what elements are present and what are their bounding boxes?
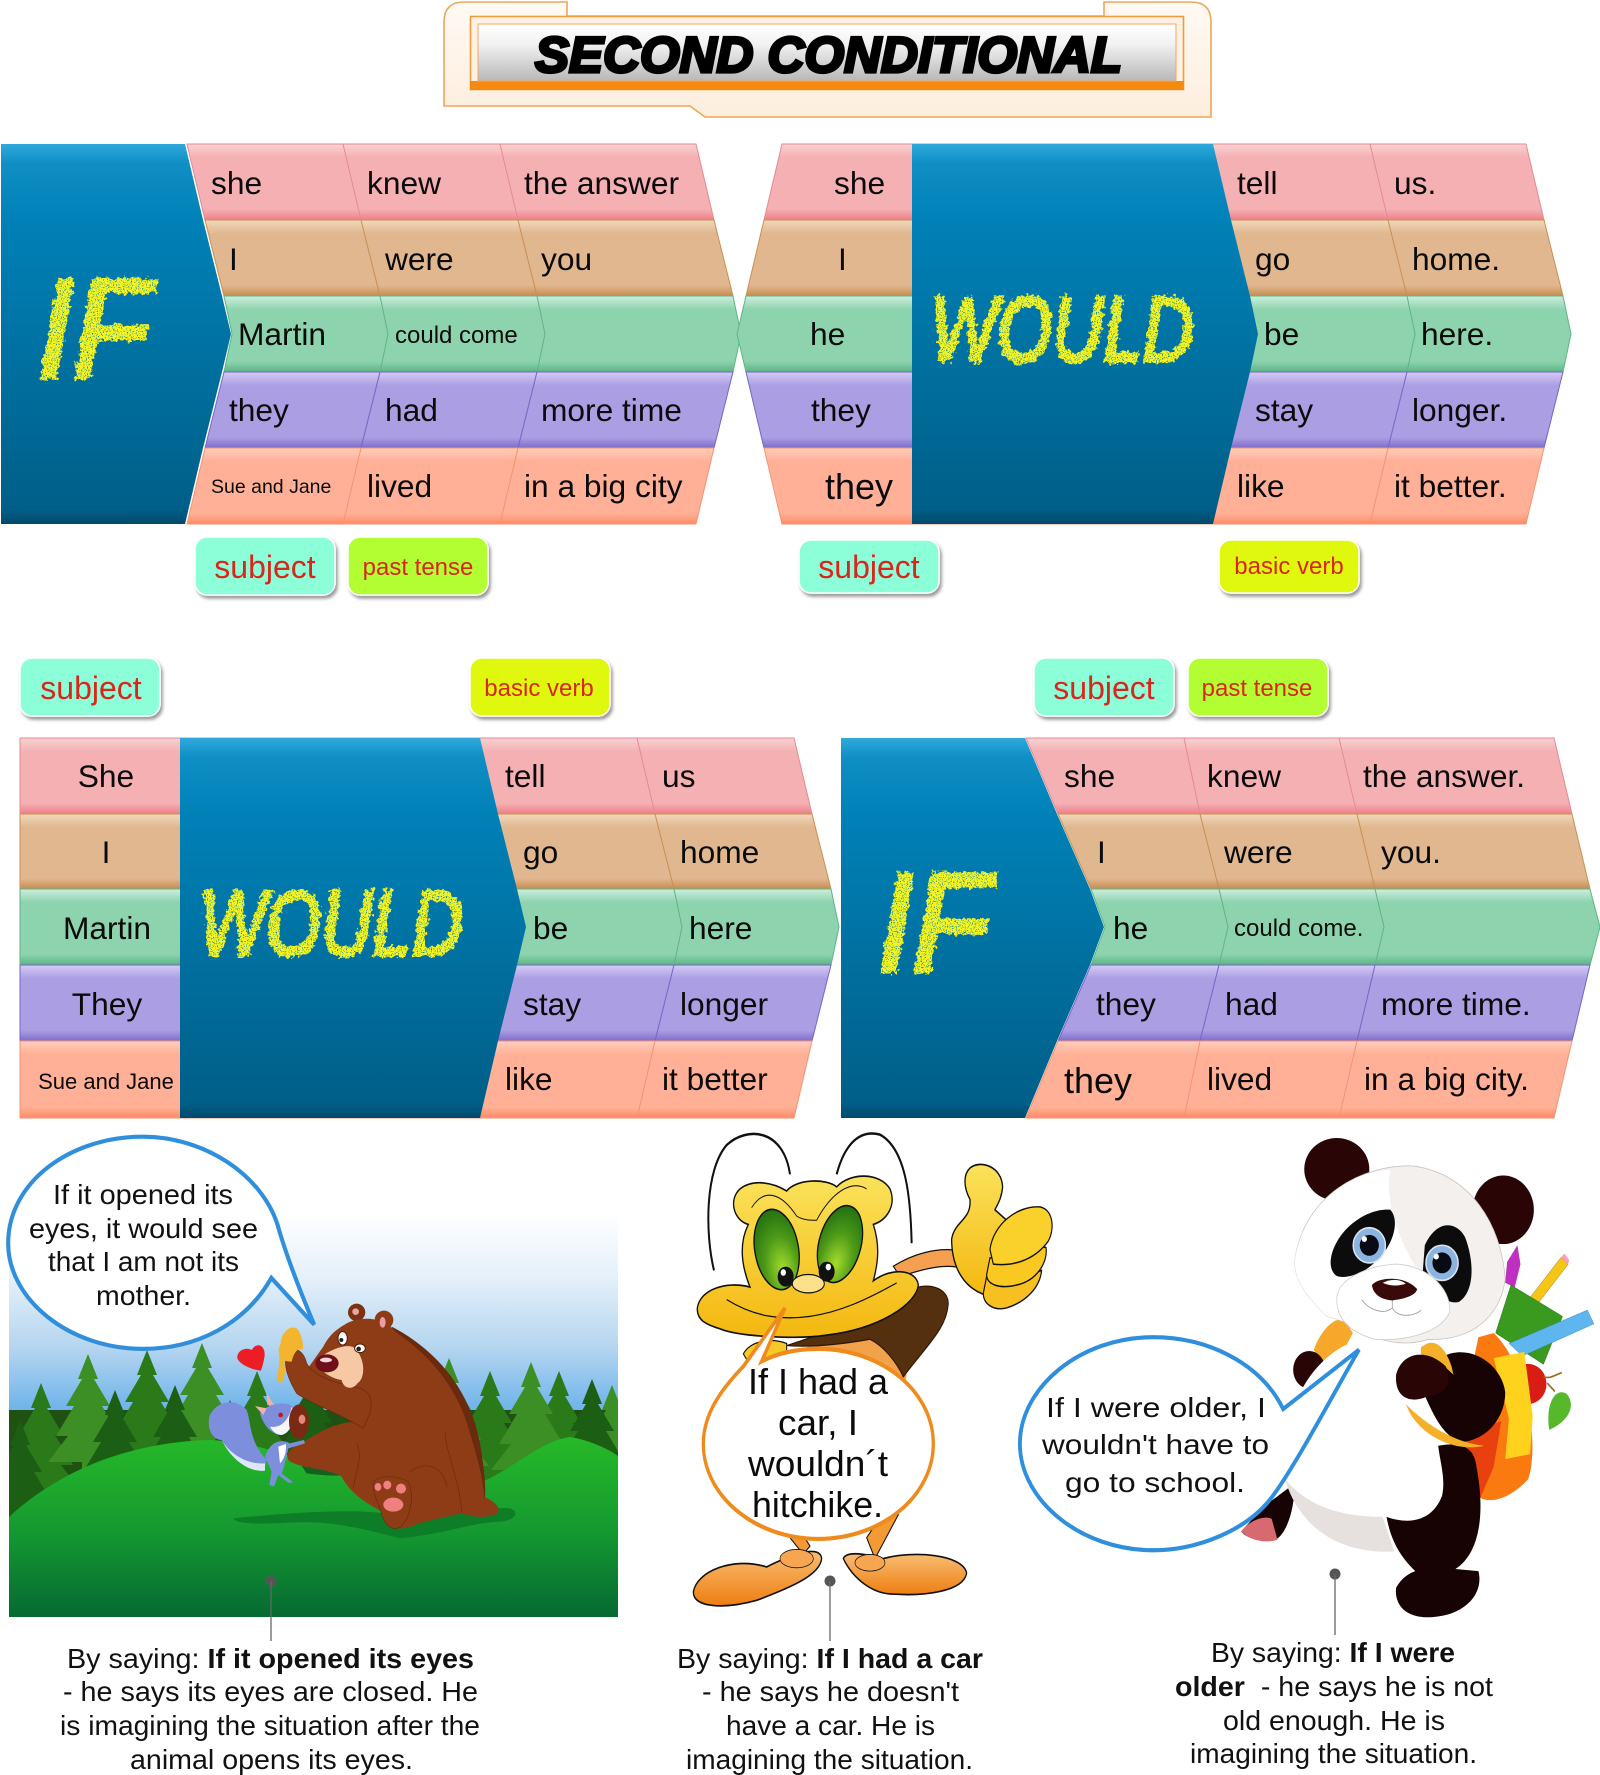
row: they like it better: it better. [1394,468,1507,504]
speech bubble: panda: If I were older, I [1046,1392,1266,1423]
caption: bear: By saying: If it opened its eyes [67,1643,474,1674]
row: She tell us [20,738,812,814]
row: he be here: he [810,316,845,352]
labels: subject and past tense, lower right: subject [1053,670,1155,706]
labels: subject and basic verb, top right: basic verb [1234,553,1344,580]
speech bubble: bear: eyes, it would see [29,1213,258,1244]
blue arrow: WOULD: WOULD [199,873,463,975]
speech bubble: panda: wouldn't have to [1041,1429,1269,1460]
row: he could come: could come. [1234,915,1363,942]
row: I go home: go [523,834,558,870]
row: I were you: I [229,241,238,277]
row: Martin be here: be [533,910,568,946]
row: Sue and Jane like it better: it better [662,1061,768,1097]
labels: subject and basic verb, lower left [20,658,610,716]
illustration: yellow bug [693,1133,1052,1606]
caption: bear: - he says its eyes are closed. He [63,1676,478,1707]
caption: bug: - he says he doesn't [702,1676,959,1707]
row: She tell us: tell [505,758,546,794]
row: they stay longer [746,372,1563,448]
illustration: bear and squirrel scene [0,1137,652,1617]
row: I were you: I [1097,834,1106,870]
row: Martin could come [224,296,741,372]
row: I go home [746,220,1563,296]
row: I go home: home. [1412,241,1500,277]
title banner [444,2,1211,117]
row: Sue and Jane like it better: Sue and Jane [38,1069,174,1094]
caption: bear: is imagining the situation after the [60,1710,480,1741]
row: she tell us: us. [1394,165,1436,201]
pin: panda caption pointer [1330,1568,1340,1635]
caption: bear [60,1643,480,1775]
row: she knew the answer: the answer [524,165,679,201]
row: they had more time: more time. [1381,986,1531,1022]
title banner: SECOND CONDITIONAL [535,27,1122,83]
row: they stay longer: they [811,392,871,428]
bear [233,1304,516,1538]
caption: panda: imagining the situation. [1190,1738,1477,1769]
blue arrow: WOULD [180,738,526,1118]
row: they had more time: had [385,392,438,428]
row: they stay longer: stay [1255,392,1313,428]
labels: subject and past tense, top left: subject [214,549,316,585]
row: they stay longer: longer. [1412,392,1507,428]
blue arrow: IF: IF [38,250,157,407]
row: They stay longer: longer [680,986,769,1022]
panel: WOULD clause, top right [737,144,1571,524]
blue arrow: WOULD: WOULD [930,279,1194,381]
row: I were you: you. [1381,834,1441,870]
caption: panda: old enough. He is [1223,1705,1445,1736]
squirrel [209,1393,309,1487]
labels: subject and basic verb, top right: subject [818,549,920,585]
caption: panda: older - he says he is not [1175,1671,1493,1702]
row: Martin could come: Martin [238,316,326,352]
row: she knew the answer: knew [367,165,441,201]
row: They stay longer: They [72,986,142,1022]
row: she tell us: tell [1237,165,1278,201]
row: I were you [205,220,733,296]
row: they lived in a big city: in a big city. [1364,1061,1529,1097]
pin: bear caption pointer [266,1576,276,1641]
row: he could come: he [1113,910,1148,946]
row: they lived in a big city [1026,1041,1572,1118]
row: she tell us: she [834,165,885,201]
blue arrow: IF [841,738,1104,1118]
row: he could come [1091,889,1600,965]
honey [278,1327,303,1383]
row: they had more time: had [1225,986,1278,1022]
row: he be here [737,296,1571,372]
labels: subject and past tense, lower right: past tense [1202,675,1312,702]
caption: bear: animal opens its eyes. [130,1744,413,1775]
row: Sue and Jane lived in a big city: lived [367,468,432,504]
row: she knew the answer: the answer. [1363,758,1525,794]
row: she knew the answer: she [211,165,262,201]
row: they like it better [764,448,1544,524]
speech bubble: bug: wouldn´t [747,1443,888,1484]
row: Sue and Jane lived in a big city [187,448,714,524]
speech bubble: bear: mother. [96,1280,191,1311]
labels: subject and basic verb, lower left: basic verb [484,675,594,702]
speech bubble: bear: that I am not its [48,1246,239,1277]
row: she knew the answer: she [1064,758,1115,794]
row: I were you: were [1223,834,1293,870]
row: I were you [1058,814,1590,889]
row: Martin be here [20,889,839,965]
row: I go home: home [680,834,759,870]
caption: bug [677,1643,983,1775]
speech bubble: bug [703,1308,933,1539]
row: Martin be here: here [689,910,752,946]
row: I go home: go [1255,241,1290,277]
row: he be here: be [1264,316,1299,352]
speech bubble: bug: If I had a [748,1361,889,1402]
row: she knew the answer [1026,738,1572,814]
row: she knew the answer [187,144,714,220]
row: Sue and Jane lived in a big city: Sue and Jane [211,476,331,498]
row: Martin be here: Martin [63,910,151,946]
panel: IF second, lower right [841,738,1600,1118]
row: Sue and Jane like it better: like [505,1061,553,1097]
row: they had more time: they [229,392,289,428]
row: I were you: you [541,241,592,277]
row: Sue and Jane like it better [20,1041,812,1118]
pin: bug caption pointer [824,1576,836,1641]
speech bubble: bug: car, I [778,1402,858,1443]
blue arrow: IF [1,144,231,524]
row: they like it better: they [825,466,893,507]
row: they had more time [1058,965,1590,1041]
row: They stay longer: stay [523,986,581,1022]
speech bubble: bug: hitchike. [752,1484,883,1525]
blue arrow: IF: IF [878,844,997,1001]
row: they had more time: they [1096,986,1156,1022]
panel: WOULD first, lower left [20,738,839,1118]
panel: IF clause, top left [1,144,741,524]
row: I go home [20,814,831,889]
heart [237,1345,265,1371]
caption: bug: have a car. He is [726,1710,935,1741]
row: they had more time [205,372,733,448]
row: they lived in a big city: they [1064,1060,1132,1101]
row: She tell us: us [662,758,695,794]
row: They stay longer [20,965,831,1041]
row: they like it better: like [1237,468,1285,504]
row: they lived in a big city: lived [1207,1061,1272,1097]
labels: subject and basic verb, lower left: subject [40,670,142,706]
row: she knew the answer: knew [1207,758,1281,794]
row: Martin could come: could come [395,322,518,349]
speech bubble: panda: go to school. [1065,1467,1245,1498]
caption: panda [1175,1637,1493,1769]
speech bubble: bear: If it opened its [53,1179,233,1210]
caption: bug: imagining the situation. [686,1744,973,1775]
illustration: panda with backpack [1241,1138,1594,1617]
blue arrow: WOULD [912,144,1258,524]
caption: bug: By saying: If I had a car [677,1643,983,1674]
speech bubble: bear [8,1137,314,1349]
row: Sue and Jane lived in a big city: in a big city [524,468,683,504]
labels: subject and past tense, top left: past tense [363,554,473,581]
row: he be here: here. [1421,316,1493,352]
row: I go home: I [838,241,847,277]
speech bubble: panda [1020,1337,1359,1550]
labels: subject and past tense, lower right [1034,658,1328,716]
row: She tell us: She [78,758,134,794]
caption: panda: By saying: If I were [1211,1637,1455,1668]
row: I were you: were [384,241,454,277]
row: she tell us [764,144,1544,220]
row: I go home: I [102,834,110,870]
labels: subject and past tense, top left [195,537,488,595]
row: they had more time: more time [541,392,682,428]
labels: subject and basic verb, top right [799,540,1359,593]
